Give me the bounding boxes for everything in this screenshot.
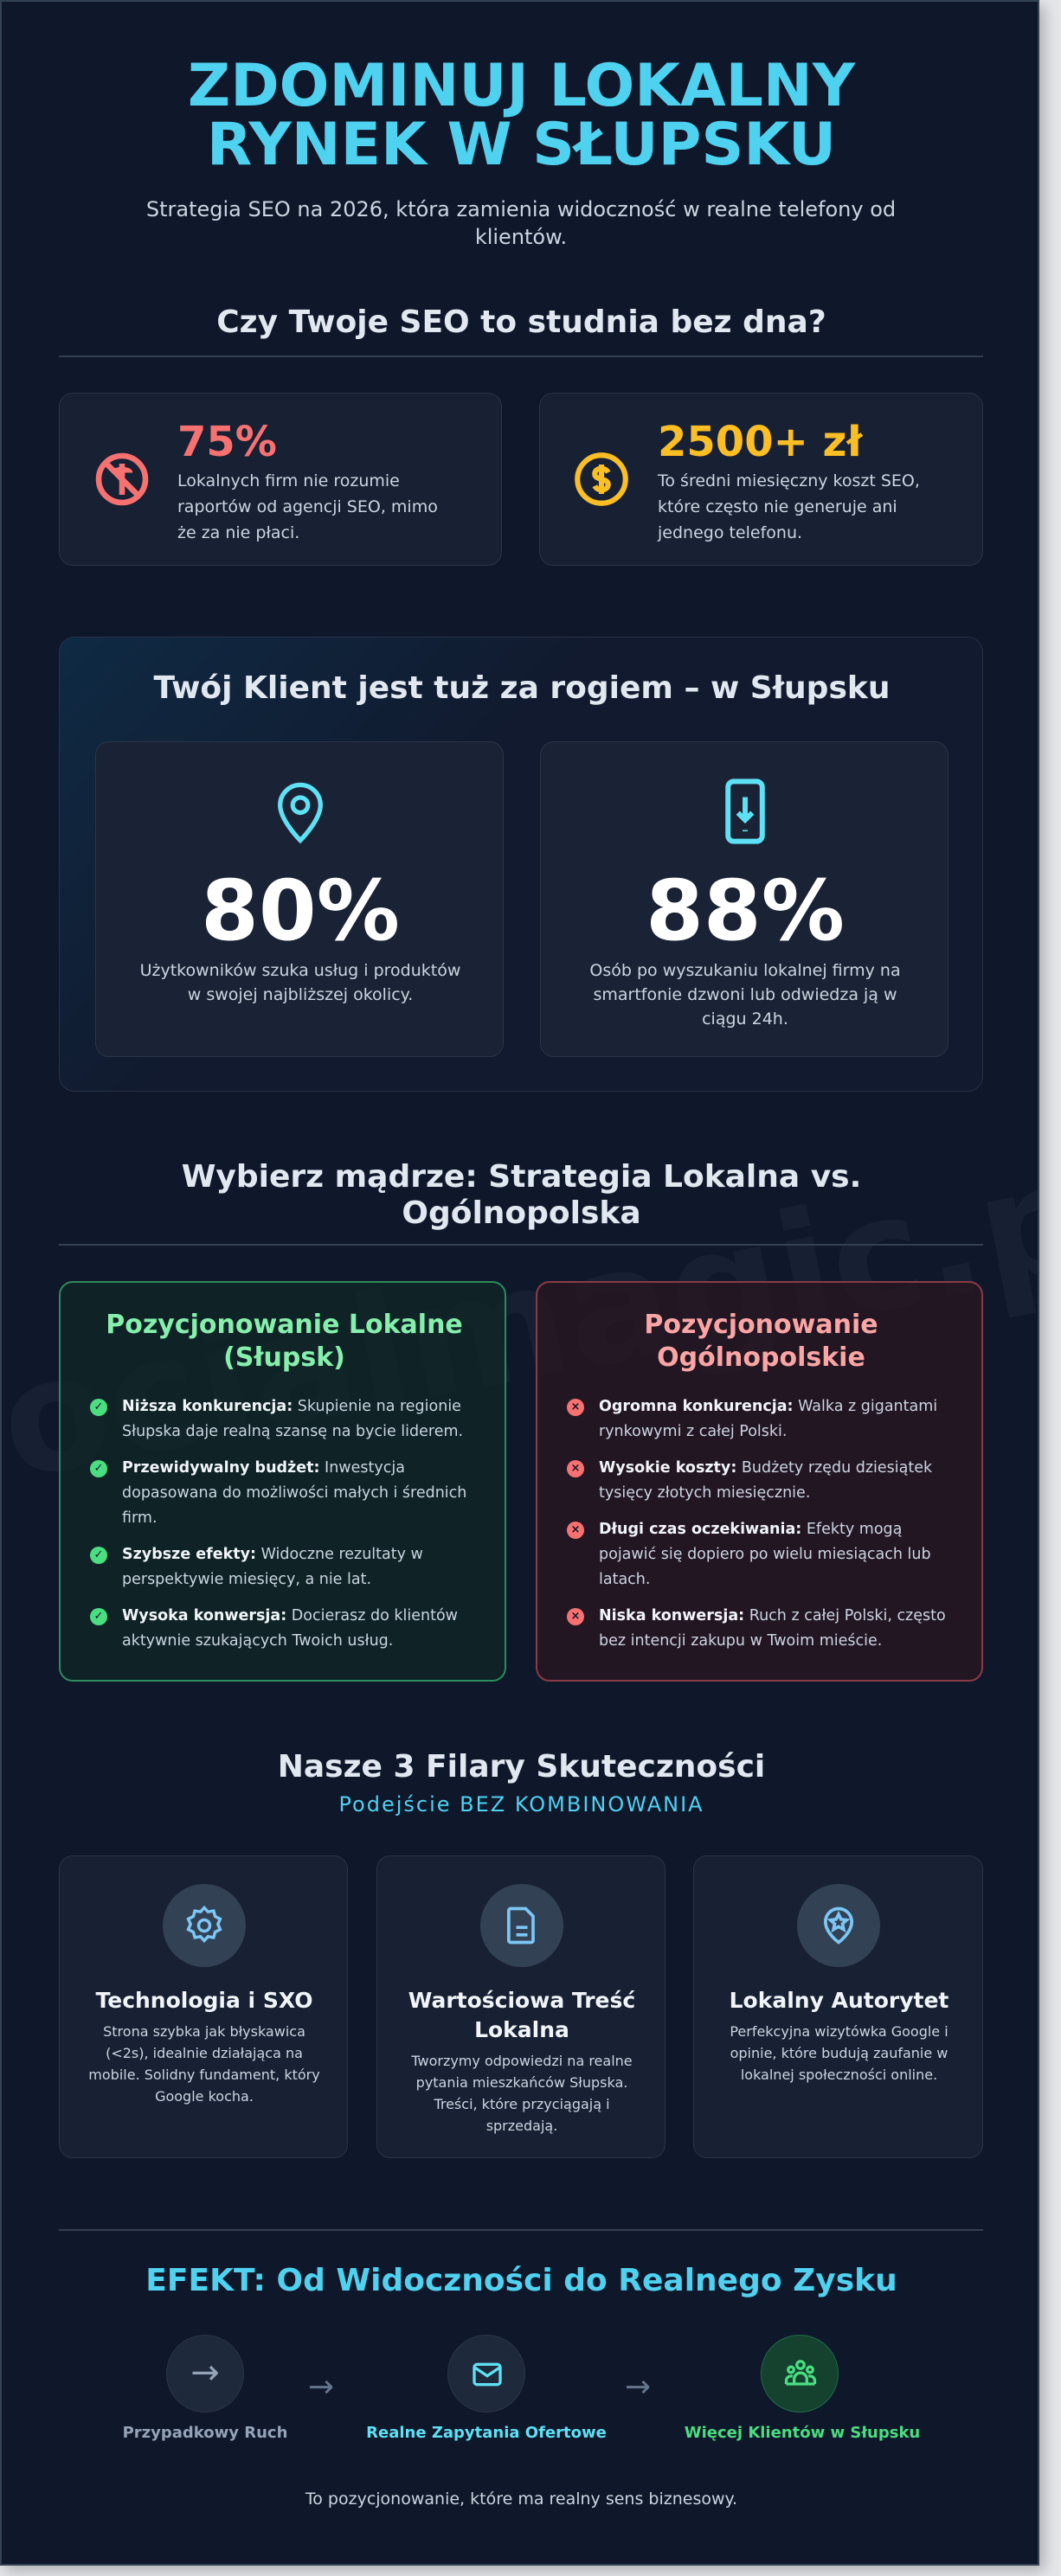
card: 80%: 80% [201,862,400,959]
heading: Pozycjonowanie [644,1310,878,1340]
stat text: 75% [177,418,277,466]
flow: step 2: Realne Zapytania Ofertowe [366,2424,607,2442]
list: Wysoka konwersja: Docierasz do klientów aktywnie szukających Twoich usług. [122,1607,458,1650]
heading [106,1310,463,1373]
list: ✓ [94,1400,103,1413]
card: 2500 zł [539,393,983,566]
stat text: 2500+ zł [658,418,862,466]
flow: step 1: Przypadkowy Ruch [123,2424,287,2442]
heading [644,1310,878,1373]
icon: document [480,1884,563,1967]
flow: step 3: Więcej Klientów w Słupsku [685,2424,920,2442]
heading: (Słupsk) [223,1342,345,1373]
stat text: Lokalnych firm nie rozumie raportów od agencji SEO, mimo że za nie płaci. [177,471,438,542]
panel: ogolnopolskie [536,1281,983,1682]
heading: Pozycjonowanie Lokalne [106,1310,463,1340]
heading: studnia: Czy Twoje SEO to studnia bez dna? [216,304,826,340]
heading: Twój Klient jest tuż za rogiem – w Słupsku [154,670,890,706]
heading: efekt: EFEKT: Od Widoczności do Realnego Zysku [145,2263,897,2298]
list: ✓ [94,1610,103,1623]
pillar: technologia: Technologia i SXO [95,1988,312,2013]
flow: step 3 [685,2335,920,2442]
pillar: tresc: Tworzymy odpowiedzi na realne pytania mieszkańców Słupska. Treści, które przyciągają i sprzedają. [411,2053,633,2134]
list: × [571,1523,580,1536]
card: 88%: 88% [646,862,845,959]
list: × [571,1462,580,1475]
icon: phone [725,779,765,844]
list: Niska konwersja: Ruch z całej Polski, często bez intencji zakupu w Twoim mieście. [599,1607,946,1650]
subtitle: Strategia SEO na 2026, która zamienia widoczność w realne telefony od klientów. [146,197,896,249]
icon: pin [278,782,323,844]
title [188,52,856,179]
heading: filary: Nasze 3 Filary Skuteczności [278,1749,765,1785]
list: ✓ [94,1462,103,1475]
heading: wybierz: Wybierz mądrze: Strategia Lokalna vs. [182,1159,861,1195]
heading: wybierz [182,1159,861,1231]
title: RYNEK W SŁUPSKU [207,111,836,179]
flow: step 1: → [190,2353,220,2393]
card: 75% [59,393,502,566]
arrow: → [625,2369,651,2405]
list [567,1398,946,1650]
heading: wybierz: Ogólnopolska [402,1195,641,1231]
icon: gear [163,1884,246,1967]
card: 88% [540,741,948,1057]
panel: lokalne [59,1281,506,1682]
pillar: technologia [59,1855,348,2158]
pillar: technologia: Strona szybka jak błyskawica (<2s), idealnie działająca na mobile. Solidny fundament, który Google kocha. [88,2023,320,2105]
list: Ogromna konkurencja: Walka z gigantami rynkowymi z całej Polski. [599,1398,937,1440]
icon: coin [575,452,628,506]
list: × [571,1610,580,1623]
list: Przewidywalny budżet: Inwestycja dopasowana do możliwości małych i średnich firm. [122,1459,466,1527]
title: ZDOMINUJ LOKALNY [188,52,855,120]
pillar: tresc [376,1855,666,2158]
list: Długi czas oczekiwania: Efekty mogą pojawić się dopiero po wielu miesiącach lub latach. [599,1521,931,1588]
list: Niższa konkurencja: Skupienie na regionie Słupska daje realną szansę na bycie liderem. [122,1398,463,1440]
card: 80% [95,741,504,1057]
list: × [571,1400,580,1413]
card: 88%: Osób po wyszukaniu lokalnej firmy na smartfonie dzwoni lub odwiedza ją w ciągu 24h. [589,961,901,1028]
list: Wysokie koszty: Budżety rzędu dziesiątek tysięcy złotych miesięcznie. [599,1459,932,1502]
pillar: autorytet [693,1855,983,2158]
list: Szybsze efekty: Widoczne rezultaty w perspektywie miesięcy, a nie lat. [122,1546,423,1588]
heading: Ogólnopolskie [657,1342,865,1373]
pillar: autorytet: Perfekcyjna wizytówka Google i opinie, które budują zaufanie w lokalnej społeczności online. [730,2023,948,2083]
stat text: To średni miesięczny koszt SEO, które często nie generuje ani jednego telefonu. [658,471,920,542]
list: ✓ [94,1548,103,1561]
pillar: autorytet: Lokalny Autorytet [730,1988,948,2013]
pillar: tresc: Wartościowa Treść Lokalna [408,1988,635,2042]
stat text [658,418,920,542]
card: 80%: Użytkowników szuka usług i produktów w swojej najbliższej okolicy. [140,961,460,1004]
footer text: To pozycjonowanie, które ma realny sens biznesowy. [305,2489,737,2509]
flow: step 2 [366,2335,607,2442]
flow: step 1 [123,2335,287,2442]
list [90,1398,466,1650]
subheading: Podejście BEZ KOMBINOWANIA [338,1792,704,1817]
icon: badge [797,1884,880,1967]
arrow: → [308,2369,334,2405]
icon: no-money [95,453,149,505]
panel: klient [59,637,983,1092]
stat text [177,418,438,542]
